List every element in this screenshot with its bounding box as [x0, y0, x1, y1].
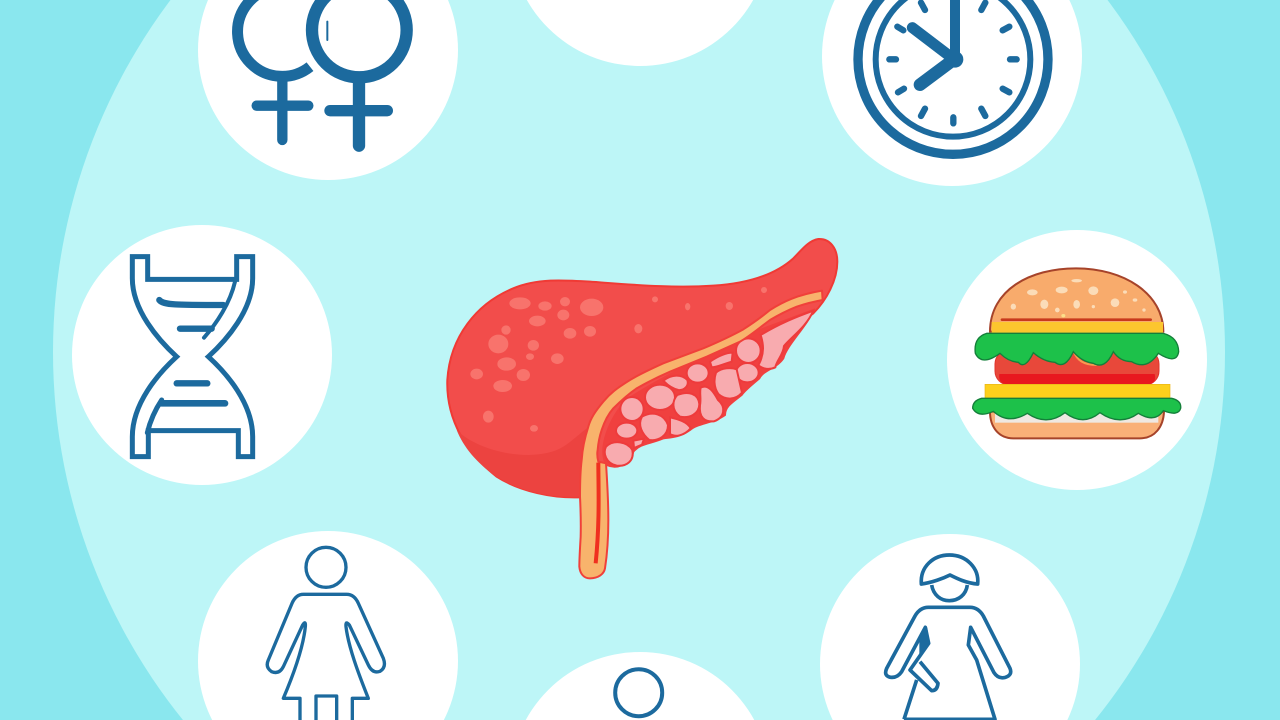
icon: pregnant woman figure: [886, 555, 1011, 719]
white circle: sex factor: [198, 0, 458, 180]
bun line and cheese band: [1002, 316, 1151, 324]
darker lower shading: [457, 428, 587, 497]
pancreas body: [447, 239, 837, 497]
white circle: age clock: [822, 0, 1082, 186]
icon: woman figure: [267, 547, 384, 720]
icon: clock: [858, 0, 1048, 154]
top lettuce: [975, 333, 1179, 365]
lower cheese: [985, 384, 1170, 399]
bottom bun: [990, 412, 1164, 438]
bottom lettuce: [973, 398, 1181, 420]
white circle: bottom, cropped: [510, 652, 770, 720]
white circle: woman: [198, 531, 458, 720]
white circle: diet: [947, 230, 1207, 490]
icon: DNA helix: [132, 257, 253, 457]
inner duct line: [596, 463, 599, 563]
pancreatic duct: [579, 291, 823, 578]
icon: cropped person head: [615, 669, 662, 716]
white circle: pregnant woman: [820, 534, 1080, 720]
top bun: [990, 268, 1163, 332]
sesame seeds: [1011, 279, 1146, 317]
lobules: [605, 311, 813, 466]
white circle: genetics: [72, 225, 332, 485]
icon: female symbols: [238, 0, 407, 146]
icon: hamburger: [973, 268, 1181, 438]
patty: [995, 350, 1159, 385]
illustration: pancreas: [447, 239, 837, 578]
lobule mass backing: [603, 310, 813, 467]
light mottled spots: [470, 287, 767, 432]
white circle: top, cropped: [510, 0, 770, 66]
